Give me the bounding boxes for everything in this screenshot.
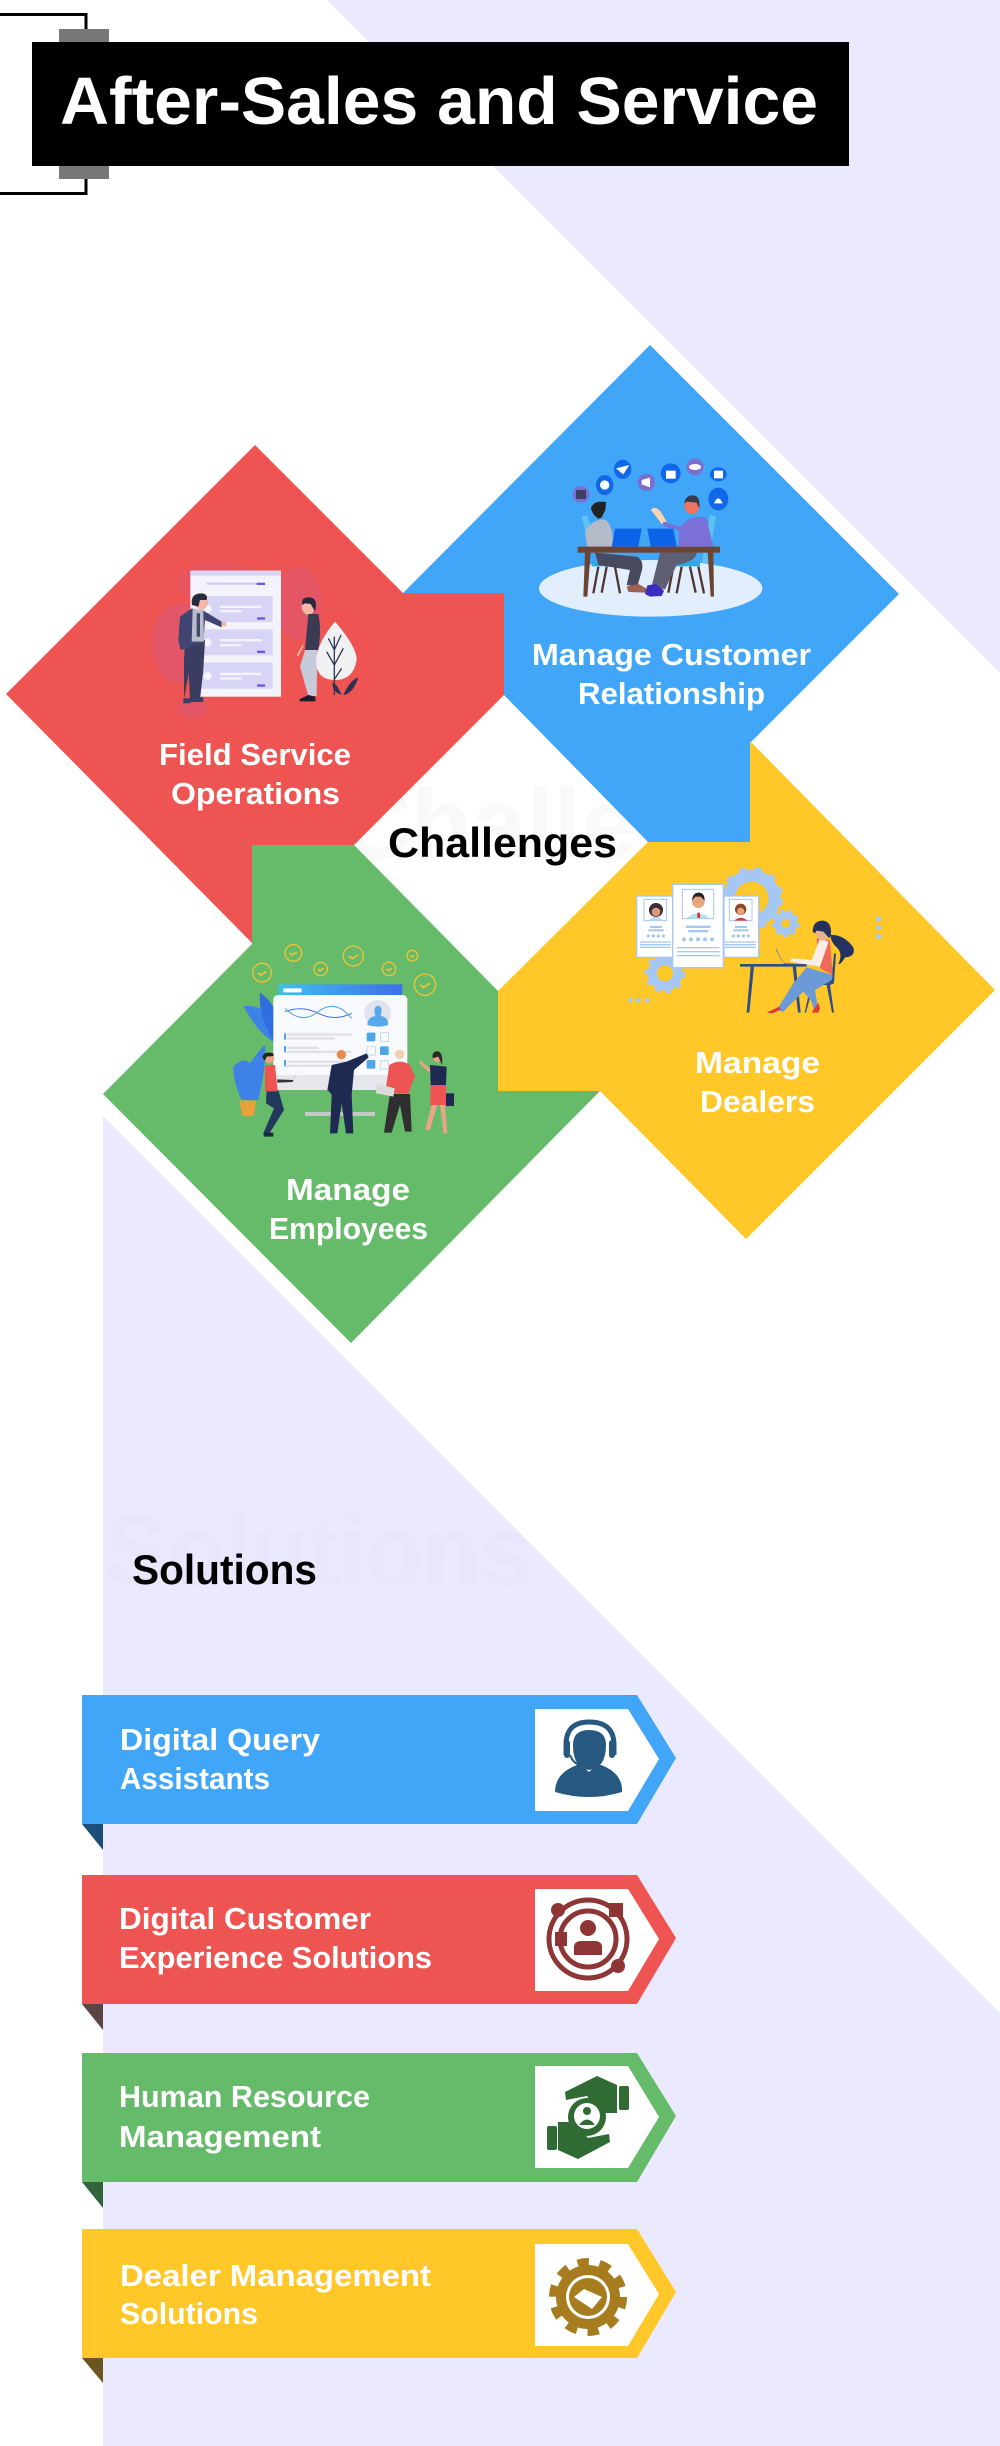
label: Digital Query Assistants: Assistants: [120, 1761, 270, 1796]
banner: Human Resource Management: [82, 2053, 676, 2208]
label: Digital Customer Experience Solutions: [119, 1901, 432, 1975]
label: Field Service Operations: Field Service: [159, 737, 351, 772]
label: Manage Customer Relationship: [532, 637, 811, 711]
ghost heading: Challenges: Challenges: [340, 768, 867, 880]
label: Human Resource Management: Management: [119, 2119, 321, 2154]
label: Dealer Management Solutions: Dealer Management: [120, 2258, 431, 2293]
illustration: customer relationship meeting: [539, 459, 762, 617]
title banner: After-Sales and Service: [60, 64, 818, 139]
label: Digital Query Assistants: [120, 1722, 321, 1796]
panel: Manage Customer Relationship: [402, 345, 899, 842]
label: Dealer Management Solutions: [120, 2258, 431, 2331]
label: Manage Customer Relationship: Manage Customer: [532, 637, 811, 672]
banner: Dealer Management Solutions: [82, 2229, 676, 2383]
illustration: field service: [152, 562, 358, 718]
label: Manage Employees: [269, 1172, 428, 1246]
banner: Digital Customer Experience Solutions: [82, 1875, 676, 2030]
label: Digital Customer Experience Solutions: Experience Solutions: [119, 1940, 432, 1975]
icon: customer experience target: [549, 1900, 627, 1978]
label: Human Resource Management: Human Resource: [119, 2079, 370, 2114]
banner: Digital Query Assistants: [82, 1695, 676, 1850]
illustration: employees at dashboard: [233, 945, 454, 1137]
label: Human Resource Management: [119, 2079, 370, 2154]
background: top right lavender triangle: [327, 0, 1000, 673]
label: Manage Employees: Manage: [286, 1172, 410, 1207]
illustration: dealer profiles: [628, 870, 881, 1013]
heading: Solutions: Solutions: [132, 1546, 317, 1593]
title banner: [0, 14, 849, 194]
icon: support agent headset: [555, 1722, 622, 1797]
ghost heading: Solutions: Solutions: [105, 1495, 532, 1607]
label: Digital Customer Experience Solutions: Digital Customer: [119, 1901, 371, 1936]
label: Manage Dealers: Manage: [695, 1045, 820, 1080]
heading: Challenges: Challenges: [388, 819, 617, 866]
icon: gear with handshake: [554, 2263, 622, 2331]
label: Manage Dealers: [695, 1045, 820, 1119]
label: Manage Dealers: Dealers: [700, 1084, 815, 1119]
label: Dealer Management Solutions: Solutions: [120, 2296, 258, 2331]
label: Field Service Operations: Operations: [171, 776, 340, 811]
label: Manage Customer Relationship: Relationship: [578, 676, 765, 711]
label: Digital Query Assistants: Digital Query: [120, 1722, 321, 1757]
icon: hands holding person gear: [547, 2076, 629, 2159]
label: Manage Employees: Employees: [269, 1211, 428, 1246]
panel: Manage Employees: [103, 845, 600, 1343]
panel: Field Service Operations: [6, 445, 504, 943]
label: Field Service Operations: [159, 737, 351, 811]
panel: Manage Dealers: [498, 741, 995, 1239]
background: lower lavender panel: [103, 1116, 1000, 2446]
